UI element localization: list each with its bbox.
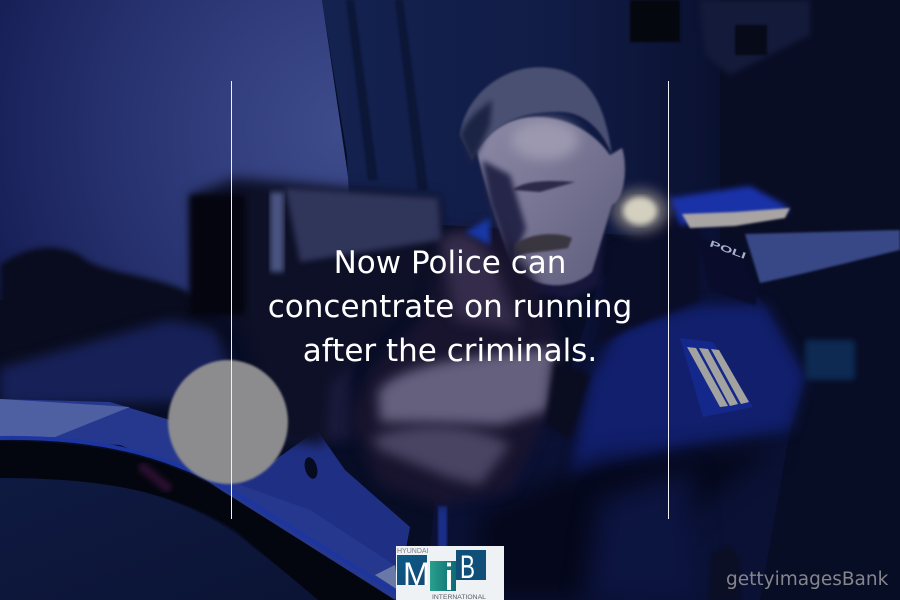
road [0, 320, 240, 405]
caption text: after the criminals. [303, 333, 597, 369]
caption text [268, 245, 632, 369]
lens flare disc [168, 360, 288, 484]
watermark: gettyimagesBank [726, 569, 888, 590]
officer coat [425, 215, 805, 600]
caption text: Now Police can [334, 245, 566, 281]
hair [460, 67, 612, 160]
pistol [190, 178, 445, 445]
sky [0, 0, 350, 300]
radio on belt [708, 545, 742, 600]
shoulder epaulette [700, 240, 758, 305]
logo: Hyundai MiB International: i [445, 557, 453, 599]
caption text: concentrate on running [268, 289, 632, 325]
car hood at right [745, 230, 900, 283]
car roof [0, 399, 412, 600]
tree line [0, 248, 230, 368]
logo: Hyundai MiB International: M [403, 556, 430, 592]
watch strap [545, 360, 590, 440]
headlight glare [612, 189, 668, 233]
background photo: police officer aiming a handgun beside a patrol car: POLI [708, 238, 747, 261]
blue shirt strip [438, 506, 447, 550]
logo: Hyundai MiB International: B [460, 549, 475, 585]
car window [0, 477, 320, 600]
face [476, 117, 625, 285]
right vertical rule [668, 81, 669, 519]
building wall [322, 0, 720, 240]
shooting hands [350, 225, 560, 505]
dim area behind disc [270, 350, 350, 440]
left vertical rule [231, 81, 232, 519]
logo: Hyundai MiB International: HYUNDAI [397, 548, 429, 555]
neck [505, 225, 605, 300]
rank patch [680, 338, 753, 417]
light bar [670, 186, 790, 225]
